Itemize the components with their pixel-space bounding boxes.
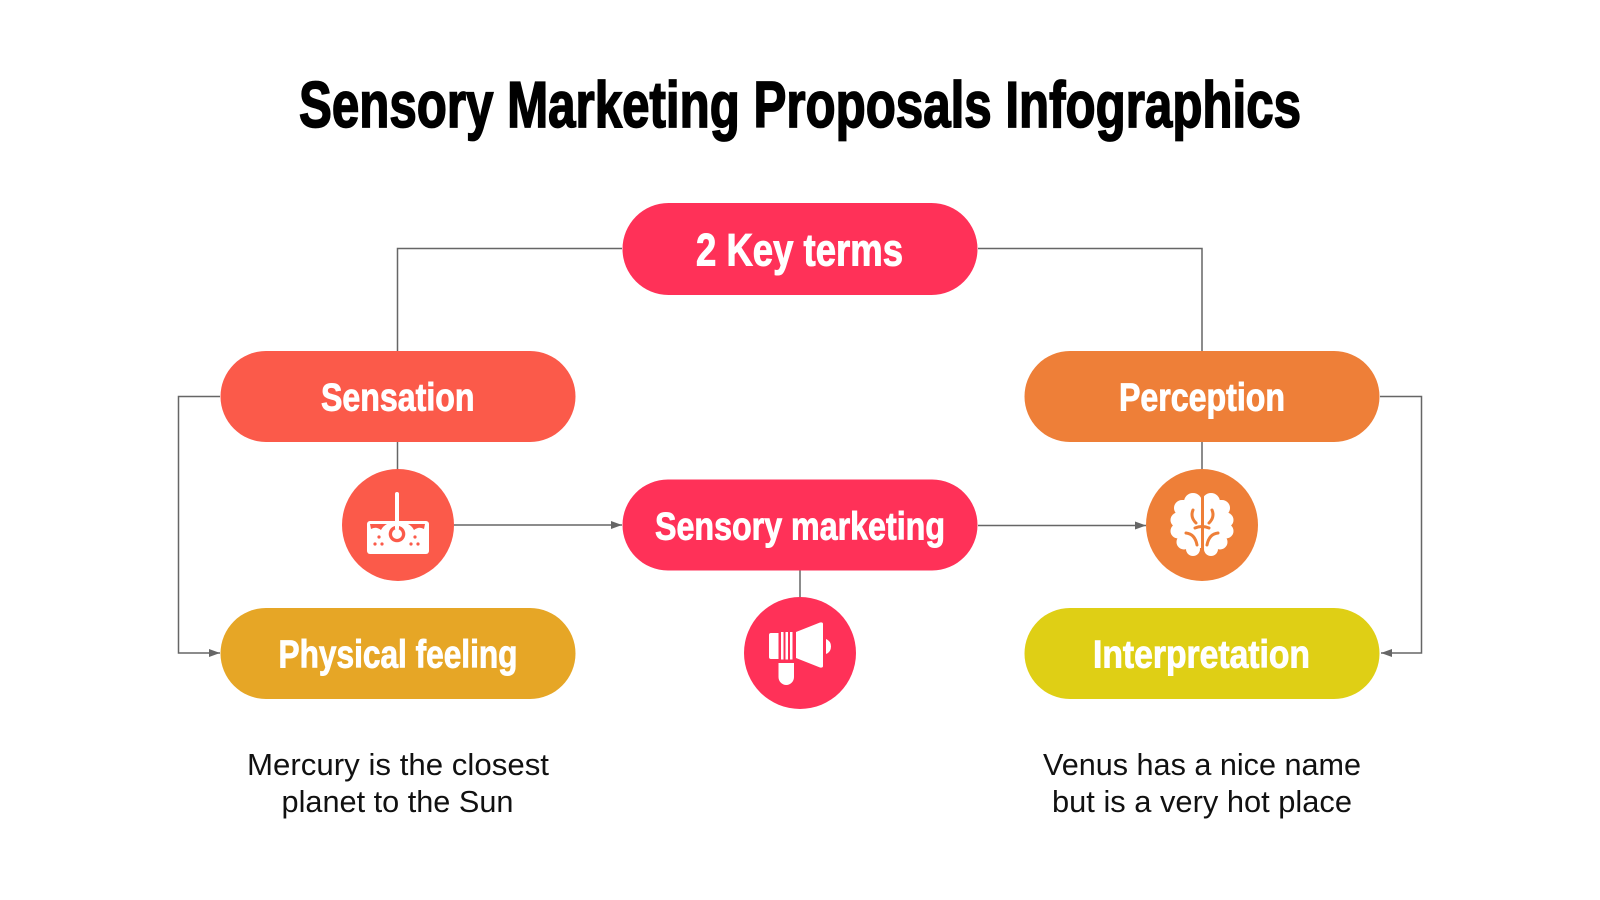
pill: 2 Key terms: 2 Key terms: [696, 224, 903, 276]
arrow: perception to interpretation: [1380, 396, 1422, 653]
pill: Sensory marketing: [622, 480, 978, 570]
pill: Physical feeling: Physical feeling: [278, 634, 518, 676]
arrow: sensory marketing to brain icon: [978, 524, 1146, 526]
connector: perception to brain icon: [1201, 442, 1203, 470]
arrow: sensation to physical feeling: [178, 396, 220, 653]
text block: Venus description: but is a very hot place: [1052, 784, 1352, 819]
pill: Interpretation: [1024, 608, 1380, 699]
icon: megaphone: [744, 597, 856, 709]
pill: Perception: Perception: [1119, 376, 1285, 420]
pill: Interpretation: Interpretation: [1093, 634, 1310, 676]
pill: Perception: [1024, 351, 1380, 442]
pill: Sensory marketing: Sensory marketing: [655, 506, 945, 548]
text block: Mercury description: Mercury is the closest: [247, 747, 549, 782]
text block: Mercury description: planet to the Sun: [282, 784, 514, 819]
text block: Venus description: Venus has a nice name: [1043, 747, 1361, 782]
connector: sensation to skin icon: [396, 442, 398, 470]
icon: brain: [1146, 469, 1258, 581]
arrow: skin icon to sensory marketing: [454, 524, 622, 526]
icon: skin and hair follicle: [342, 469, 454, 581]
connector: key terms to sensation: [398, 248, 622, 351]
pill: 2 Key terms: [622, 203, 978, 295]
pill: Sensation: [220, 351, 576, 442]
pill: Physical feeling: [220, 608, 576, 699]
connector: sensory marketing to megaphone icon: [799, 570, 801, 598]
text block: Mercury description: [247, 747, 549, 819]
connector: key terms to perception: [978, 248, 1202, 351]
pill: Sensation: Sensation: [321, 376, 474, 420]
text block: Venus description: [1043, 747, 1361, 819]
title: Sensory Marketing Proposals Infographics: [299, 68, 1301, 141]
